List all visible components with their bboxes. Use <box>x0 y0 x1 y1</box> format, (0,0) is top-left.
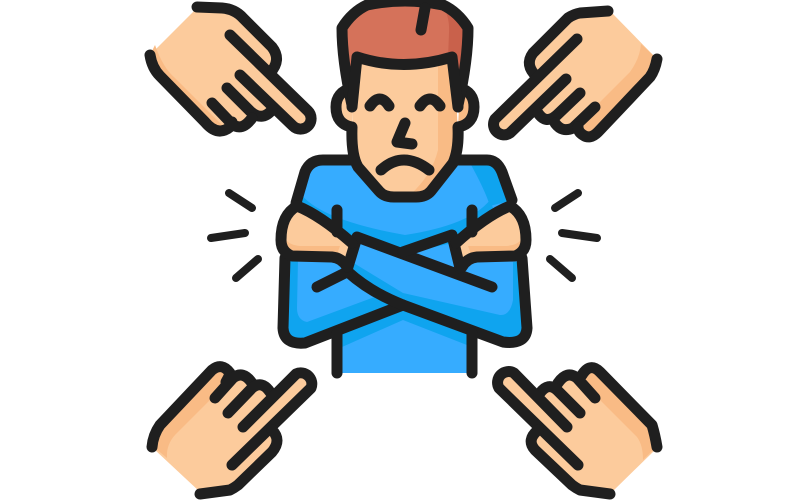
icon: left emphasis rays <box>211 193 258 278</box>
icon: bottom-left pointing hand <box>152 367 312 494</box>
mouth <box>381 160 429 170</box>
ears <box>336 88 352 127</box>
hair shading <box>443 6 467 85</box>
eyes <box>370 99 440 106</box>
shirt shading: chest <box>300 193 505 254</box>
shirt body <box>283 160 527 373</box>
icon: bottom-right pointing hand <box>498 368 657 494</box>
face skin <box>352 55 458 195</box>
icon: right emphasis rays <box>550 193 597 278</box>
face shading <box>410 60 458 195</box>
face outline <box>352 127 458 197</box>
nose <box>397 123 412 144</box>
shirt shading: left sleeve <box>284 260 403 343</box>
outlines of shirt and arms <box>281 160 527 373</box>
left hand shading <box>286 240 340 257</box>
left hand skin <box>281 206 353 267</box>
hair outline <box>342 1 468 107</box>
shirt shading: lower torso <box>337 308 472 347</box>
right hand shading <box>468 240 521 257</box>
shirt shading: right shoulder <box>470 162 513 206</box>
icon: top-right pointing hand <box>494 11 657 137</box>
icon: top-left pointing hand <box>150 7 311 133</box>
shirt shading: crossing sleeve <box>348 262 526 343</box>
right hand skin <box>456 206 526 267</box>
head <box>336 1 474 197</box>
torso and crossed arms <box>281 160 527 373</box>
hair <box>342 1 468 87</box>
